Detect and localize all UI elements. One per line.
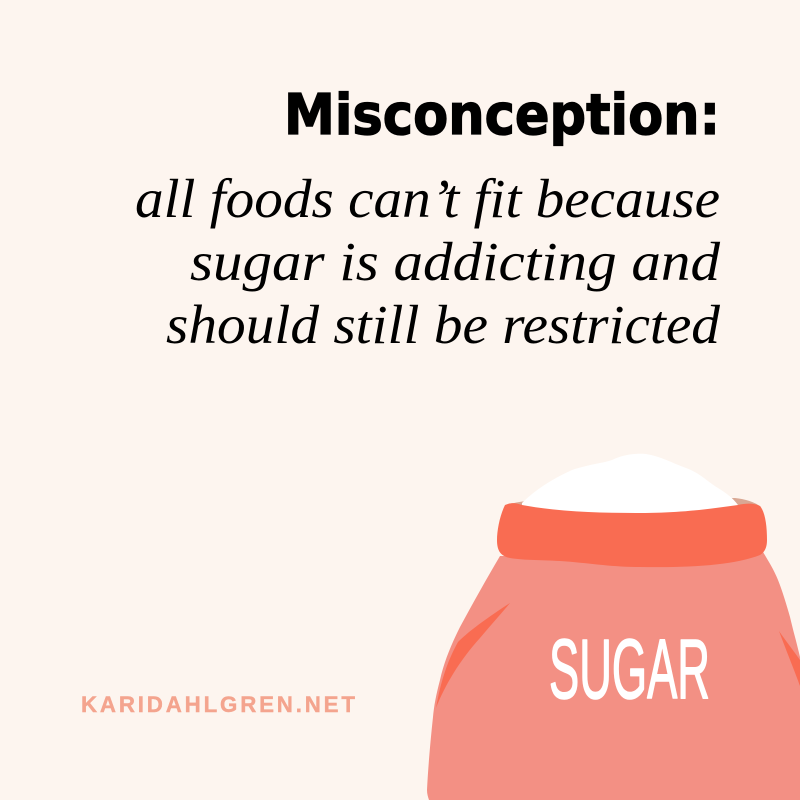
sack body (427, 552, 800, 800)
subtitle text block: sugar is addicting and (190, 231, 721, 292)
sack collar (497, 503, 767, 567)
website credit: KARIDAHLGREN.NET (81, 692, 355, 717)
icon: sugar sack (427, 454, 800, 800)
sugar pile (522, 454, 738, 520)
subtitle text block: should still be restricted (166, 294, 721, 355)
right fold (779, 631, 800, 686)
subtitle text block (135, 168, 721, 355)
sack inner rim (506, 498, 761, 507)
subtitle text block: all foods can’t fit because (135, 168, 720, 229)
title: Misconception: (284, 83, 720, 148)
left fold (436, 603, 510, 708)
